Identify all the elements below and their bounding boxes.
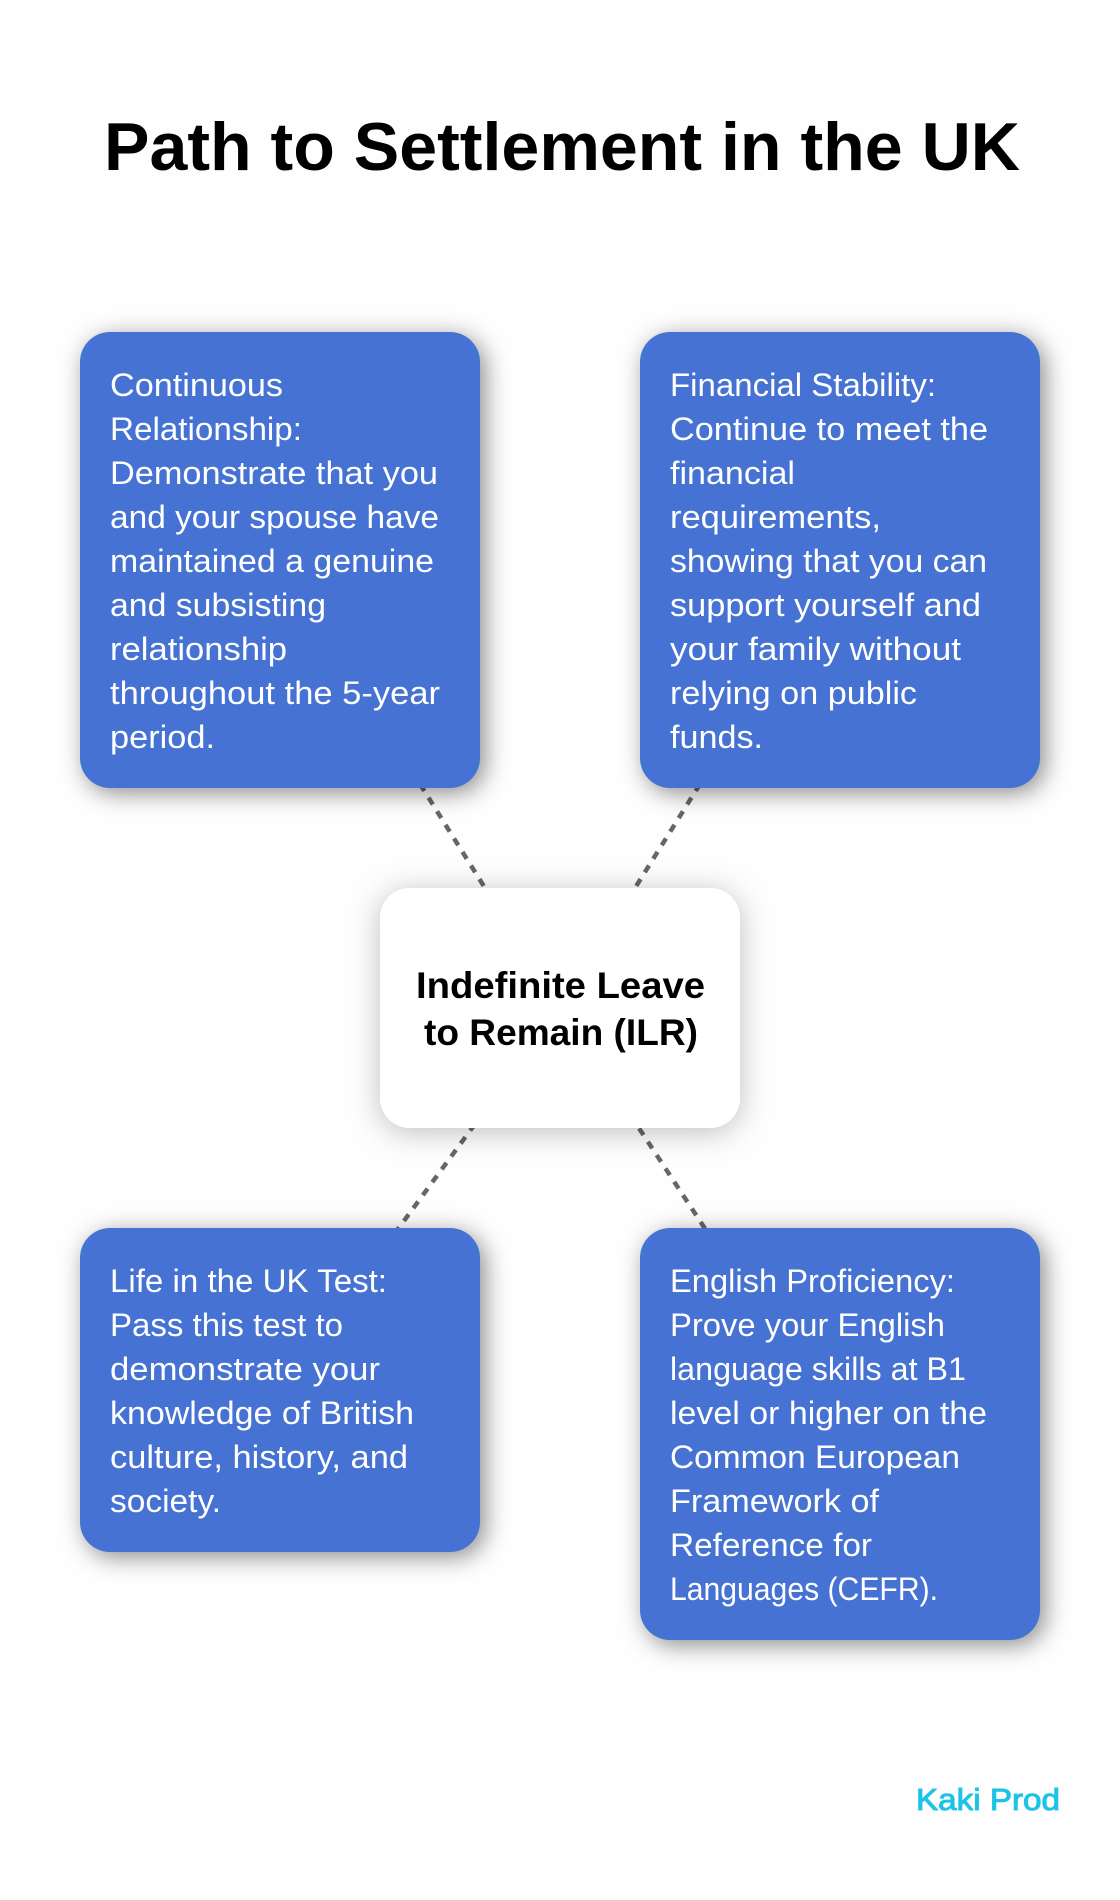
panel: Financial Stability: showing that you can	[670, 543, 987, 579]
panel: Continuous Relationship: Continuous	[110, 367, 283, 403]
panel: English Proficiency: Common European	[670, 1439, 960, 1475]
panel: English Proficiency: Languages (CEFR).	[670, 1571, 938, 1607]
panel: Financial Stability: relying on public	[670, 675, 917, 711]
panel: Continuous Relationship: maintained a genuine	[110, 543, 434, 579]
panel: English Proficiency: level or higher on the	[670, 1395, 987, 1431]
panel: Financial Stability: Financial Stability:	[670, 367, 936, 403]
panel: Continuous Relationship: and subsisting	[110, 587, 326, 623]
panel: Indefinite Leave to Remain centre node	[380, 888, 740, 1128]
panel: Life in the UK Test: Life in the UK Test:	[110, 1263, 387, 1299]
connector: centre to Life in the UK Test	[280, 1008, 560, 1390]
centre node label: to Remain (ILR)	[424, 1012, 698, 1053]
panel: Continuous Relationship	[80, 332, 480, 788]
panel: Financial Stability: support yourself and	[670, 587, 981, 623]
panel: Financial Stability: requirements,	[670, 499, 881, 535]
panel: Continuous Relationship: relationship	[110, 631, 287, 667]
panel: Financial Stability: financial	[670, 455, 795, 491]
panel: English Proficiency	[640, 1228, 1040, 1640]
panel: Life in the UK Test: culture, history, and	[110, 1439, 408, 1475]
connector: centre to Continuous Relationship	[280, 560, 560, 1008]
panel: Financial Stability: your family without	[670, 631, 961, 667]
centre node label	[416, 965, 705, 1053]
panel: English Proficiency: Reference for	[670, 1527, 872, 1563]
panel: Life in the UK Test: knowledge of British	[110, 1395, 414, 1431]
panel: Life in the UK Test: demonstrate your	[110, 1351, 380, 1387]
panel: Continuous Relationship: throughout the 5-year	[110, 675, 440, 711]
connector: centre to Financial Stability	[560, 560, 840, 1008]
connector: centre to English Proficiency	[560, 1008, 840, 1434]
panel: Continuous Relationship: and your spouse have	[110, 499, 439, 535]
panel: English Proficiency: English Proficiency:	[670, 1263, 955, 1299]
centre node label: Indefinite Leave	[416, 965, 705, 1006]
logo: Kaki Prod: Kaki Prod	[916, 1782, 1060, 1817]
panel: Life in the UK Test	[80, 1228, 480, 1552]
panel: Continuous Relationship: Demonstrate that you	[110, 455, 438, 491]
title: Path to Settlement in the UK	[104, 109, 1020, 185]
panel: Financial Stability: funds.	[670, 719, 763, 755]
panel: Financial Stability: Continue to meet the	[670, 411, 988, 447]
panel: English Proficiency: language skills at B1	[670, 1351, 966, 1387]
panel: English Proficiency: Prove your English	[670, 1307, 945, 1343]
panel: Life in the UK Test: Pass this test to	[110, 1307, 343, 1343]
panel: Life in the UK Test: society.	[110, 1483, 221, 1519]
panel: Continuous Relationship: Relationship:	[110, 411, 302, 447]
panel: Financial Stability	[640, 332, 1040, 788]
panel: English Proficiency: Framework of	[670, 1483, 879, 1519]
panel: Continuous Relationship: period.	[110, 719, 215, 755]
